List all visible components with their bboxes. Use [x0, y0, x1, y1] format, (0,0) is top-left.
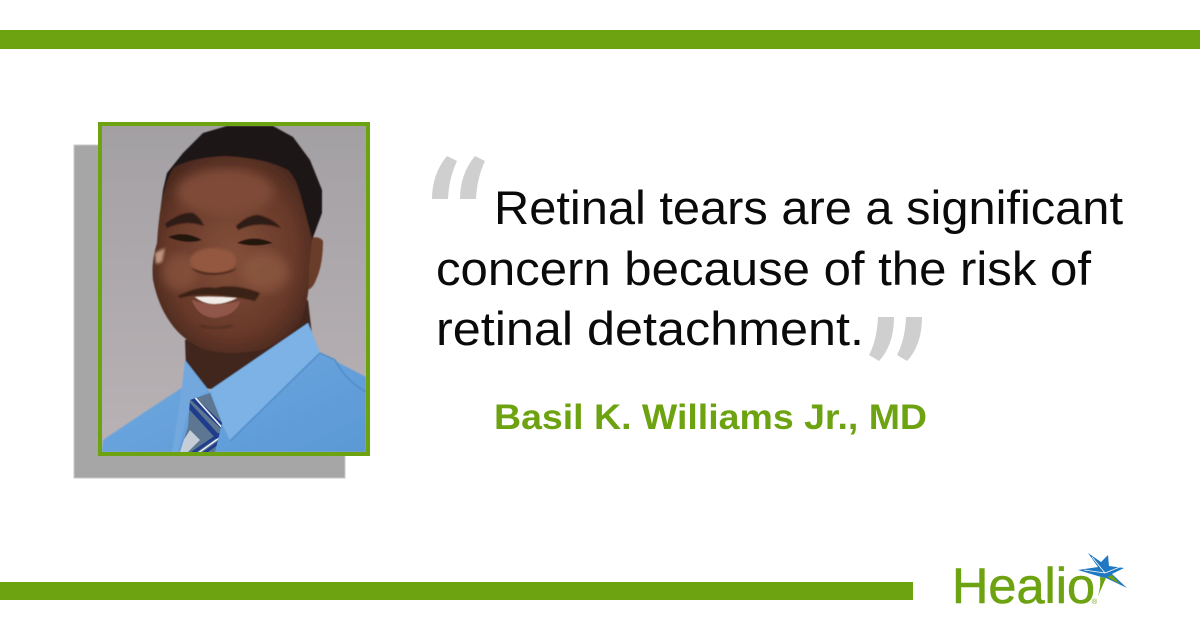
- gray offset panel behind photo: [74, 145, 345, 478]
- Healio logo: ®: [1092, 598, 1098, 606]
- portrait photo: [98, 122, 370, 456]
- neck: [185, 300, 312, 392]
- eyebrows: [165, 213, 281, 230]
- teeth: [195, 297, 237, 304]
- chin crease: [200, 325, 232, 328]
- quote text: Retinal tears are a significant: [494, 182, 1123, 235]
- Healio logo: Healio: [952, 558, 1095, 614]
- top green bar: [0, 30, 1200, 49]
- quote text: retinal detachment.: [436, 303, 864, 356]
- hair: [161, 126, 322, 240]
- opening quotation mark: [432, 156, 485, 199]
- cheek highlights: [155, 248, 165, 264]
- attribution: Basil K. Williams Jr., MD: [494, 398, 927, 437]
- moustache and mouth line: [178, 286, 260, 301]
- eyes: [168, 234, 273, 246]
- nose: [190, 248, 236, 274]
- forehead glow: [177, 170, 273, 214]
- ear: [306, 237, 323, 290]
- closing quotation mark: [869, 317, 922, 361]
- shirt collar right: [210, 323, 320, 441]
- bottom green bar: [0, 582, 913, 600]
- shirt: [102, 323, 366, 452]
- shirt collar left: [172, 360, 208, 452]
- quote text: [436, 182, 1123, 356]
- face: [152, 156, 312, 353]
- lower lip: [192, 300, 240, 318]
- quote text: concern because of the risk of: [436, 243, 1092, 296]
- tie: [180, 393, 222, 452]
